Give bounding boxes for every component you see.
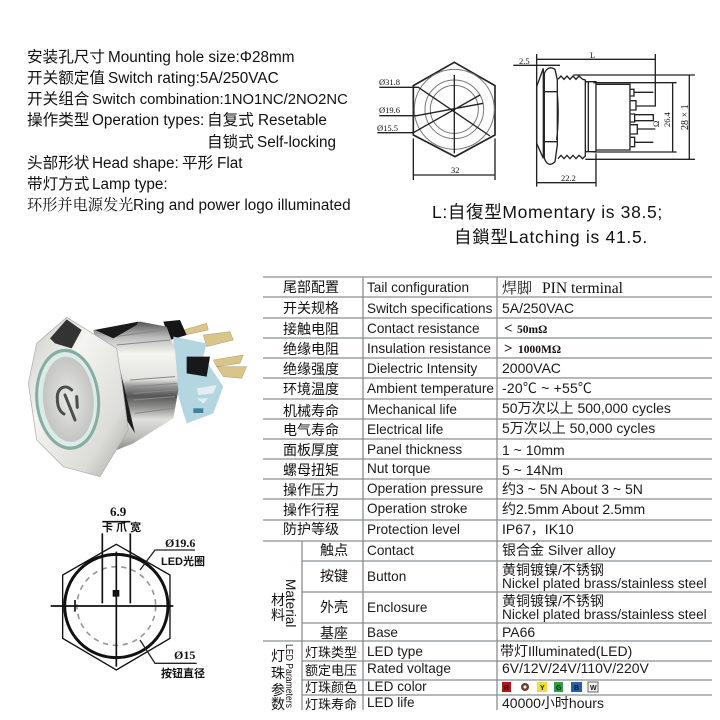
LED color swatches: W <box>590 685 597 692</box>
material rows: 黄铜镀镍/不锈钢 <box>502 593 604 609</box>
material rows: 基座 <box>320 625 348 641</box>
general specification rows: Ambient temperature <box>367 381 494 396</box>
terminals <box>631 89 655 147</box>
specification list: Switch rating:5A/250VAC <box>108 70 279 87</box>
LED parameter rows: 6V/12V/24V/110V/220V <box>502 660 650 676</box>
material rows: 触点 <box>320 542 348 558</box>
general specification rows: 1 ~ 10mm <box>502 442 565 458</box>
side view dimension labels: Ω <box>651 121 661 127</box>
LED color swatches: R <box>504 685 509 692</box>
general specification rows: 50mΩ <box>517 324 547 336</box>
specification list: 操作类型 <box>27 111 89 129</box>
general specification rows: 绝缘强度 <box>283 361 339 377</box>
general specification rows: < <box>504 321 513 337</box>
hex nut <box>544 68 558 164</box>
general specification rows: 焊脚 <box>502 280 532 297</box>
general specification rows: 50万次以上 500,000 cycles <box>502 400 671 416</box>
front view dimension labels: Ø15.5 <box>377 123 398 133</box>
specification list: 开关额定值 <box>27 69 105 87</box>
specification list: 带灯方式 <box>27 175 90 193</box>
icon: power symbol <box>57 387 77 420</box>
specification list: 头部形状 <box>27 154 90 172</box>
specification list: Head shape: <box>92 155 179 172</box>
general specification rows: Mechanical life <box>367 402 457 417</box>
LED parameter rows: 带灯Illuminated(LED) <box>500 643 632 659</box>
material rows: 黄铜镀镍/不锈钢 <box>502 562 604 578</box>
dimension lines <box>513 54 695 187</box>
front view dimension labels: Ø31.8 <box>379 77 400 87</box>
leader lines <box>377 75 490 153</box>
general specification rows: Switch specifications <box>367 301 493 316</box>
LED parameter rows: 额定电压 <box>305 663 357 678</box>
crosshair and marks <box>51 522 173 667</box>
material rows <box>271 542 707 641</box>
general specification rows: Nut torque <box>367 461 430 476</box>
LED ring diagram labels: 卡 爪 宽 <box>102 520 141 534</box>
material rows: Nickel plated brass/stainless steel <box>502 607 707 622</box>
specification list: Self-locking <box>257 134 336 151</box>
general specification rows: IP67，IK10 <box>502 521 574 537</box>
general specification rows <box>283 279 671 537</box>
side view dimension drawing <box>513 54 695 187</box>
threaded barrel <box>558 76 585 159</box>
icon: hexagon outline <box>413 62 495 157</box>
general specification rows: 机械寿命 <box>283 403 339 419</box>
concentric circles <box>414 69 494 149</box>
specification list: Flat <box>217 155 243 172</box>
specification list: 自锁式 <box>207 133 254 151</box>
side view dimension labels: L <box>590 50 595 60</box>
general specification rows: Electrical life <box>367 422 443 437</box>
L dimension note: 自鎖型Latching is 41.5. <box>454 227 648 247</box>
general specification rows: 接触电阻 <box>283 321 339 337</box>
LED parameter rows <box>271 643 650 712</box>
material rows: 银合金 Silver alloy <box>502 542 616 558</box>
front view dimension labels: 32 <box>451 165 460 175</box>
general specification rows: 1000MΩ <box>518 344 561 356</box>
hexagonal flange <box>28 317 128 477</box>
specification list: Lamp type: <box>92 176 168 193</box>
material rows: 按键 <box>320 568 348 584</box>
side view dimension labels <box>519 50 691 183</box>
general specification rows: 开关规格 <box>283 300 339 316</box>
LED color swatches <box>502 682 598 692</box>
general specification rows: 5A/250VAC <box>502 300 574 316</box>
general specification rows: Tail configuration <box>367 280 469 295</box>
specification list: Mounting hole size:Φ28mm <box>108 49 295 66</box>
general specification rows: Operation stroke <box>367 501 468 516</box>
specification list: Operation types: <box>92 112 204 129</box>
general specification rows: -20℃ ~ +55℃ <box>502 380 592 396</box>
general specification rows: 操作压力 <box>283 482 339 498</box>
LED parameter rows: 40000小时hours <box>502 695 604 711</box>
general specification rows: 绝缘电阻 <box>283 341 339 357</box>
LED parameter rows: LED type <box>367 644 423 659</box>
material rows: 外壳 <box>320 599 348 615</box>
general specification rows: PIN terminal <box>542 280 624 297</box>
general specification rows: Dielectric Intensity <box>367 361 477 376</box>
LED ring diagram <box>51 522 197 670</box>
front view dimension labels <box>377 77 460 175</box>
general specification rows: 电气寿命 <box>283 422 339 438</box>
front view dimension labels: Ø19.6 <box>379 105 400 115</box>
general specification rows: 5 ~ 14Nm <box>502 462 563 478</box>
general specification rows: > <box>504 341 513 357</box>
LED ring diagram labels <box>102 504 205 680</box>
LED parameter rows: 参 <box>271 682 285 698</box>
LED ring diagram labels: Ø19.6 <box>165 536 195 550</box>
specification table <box>263 277 712 712</box>
threaded barrel <box>93 322 178 450</box>
material rows: Nickel plated brass/stainless steel <box>502 576 707 591</box>
specification list: Switch combination:1NO1NC/2NO2NC <box>92 92 348 108</box>
material rows: Button <box>367 569 406 584</box>
LED parameter rows: 灯 <box>271 648 285 664</box>
switch product photo <box>28 317 247 477</box>
L dimension note <box>432 202 663 247</box>
side view dimension labels: 26.4 <box>662 111 672 127</box>
material rows: 材 <box>271 592 285 608</box>
hexagon and ring <box>63 544 170 670</box>
LED parameter rows: 灯珠类型 <box>305 645 357 660</box>
button head <box>537 68 543 158</box>
side view dimension labels: 22.2 <box>561 173 576 183</box>
front view dimension drawing <box>377 62 495 180</box>
LED parameter rows: LED life <box>367 695 415 710</box>
material rows: PA66 <box>502 624 535 640</box>
LED parameter rows: LED color <box>367 679 427 694</box>
LED parameter rows: Rated voltage <box>367 661 451 676</box>
width dimension <box>413 138 495 180</box>
general specification rows: 尾部配置 <box>283 279 339 295</box>
LED color swatches: Y <box>540 685 545 692</box>
general specification rows: Panel thickness <box>367 442 462 457</box>
material rows: Material <box>283 579 298 627</box>
general specification rows: 操作行程 <box>283 502 339 518</box>
general specification rows: Contact resistance <box>367 321 480 336</box>
general specification rows: 5万次以上 50,000 cycles <box>502 420 655 436</box>
switch body <box>585 82 630 152</box>
general specification rows: 约3 ~ 5N About 3 ~ 5N <box>502 481 643 497</box>
illuminated button face <box>31 346 104 453</box>
LED parameter rows: 数 <box>271 696 285 712</box>
specification list <box>27 48 351 214</box>
LED ring diagram labels: 6.9 <box>110 504 127 519</box>
LED ring diagram labels: LED光圈 <box>161 554 205 568</box>
material rows: Enclosure <box>367 600 427 615</box>
general specification rows: 防护等级 <box>283 521 339 537</box>
general specification rows: Operation pressure <box>367 481 483 496</box>
LED parameter rows: 珠 <box>271 665 285 681</box>
general specification rows: 约2.5mm About 2.5mm <box>502 501 645 517</box>
LED parameter rows: LED Parameters <box>283 644 294 708</box>
specification list: 平形 <box>182 154 214 172</box>
leader lines <box>140 550 197 663</box>
specification list: Ring and power logo illuminated <box>133 197 351 214</box>
specification list: 自复式 <box>207 111 254 129</box>
general specification rows: 面板厚度 <box>283 442 339 458</box>
general specification rows: 2000VAC <box>502 360 561 376</box>
general specification rows: Protection level <box>367 522 460 537</box>
LED parameter rows: 灯珠颜色 <box>305 680 357 695</box>
specification list: 安装孔尺寸 <box>27 48 105 66</box>
LED color swatches: B <box>574 685 579 692</box>
table grid <box>263 277 712 710</box>
LED parameter rows: 灯珠寿命 <box>305 697 357 712</box>
specification list: 开关组合 <box>27 90 90 108</box>
specification list: Resetable <box>258 112 327 129</box>
side view dimension labels: 2.5 <box>519 56 530 66</box>
L dimension note: L:自復型Momentary is 38.5; <box>432 202 663 222</box>
general specification rows: Insulation resistance <box>367 341 491 356</box>
LED ring diagram labels: 按钮直径 <box>161 666 205 680</box>
general specification rows: 螺母扭矩 <box>283 462 339 478</box>
material rows: 料 <box>271 607 285 623</box>
specification list: 环形并电源发光 <box>27 196 133 214</box>
general specification rows: 环境温度 <box>283 381 339 397</box>
terminals and base <box>163 320 247 423</box>
LED ring diagram labels: Ø15 <box>174 648 195 662</box>
LED color swatches: G <box>556 685 562 692</box>
material rows: Contact <box>367 543 414 558</box>
side view dimension labels: 28 × 1 <box>680 104 691 130</box>
material rows: Base <box>367 625 398 640</box>
